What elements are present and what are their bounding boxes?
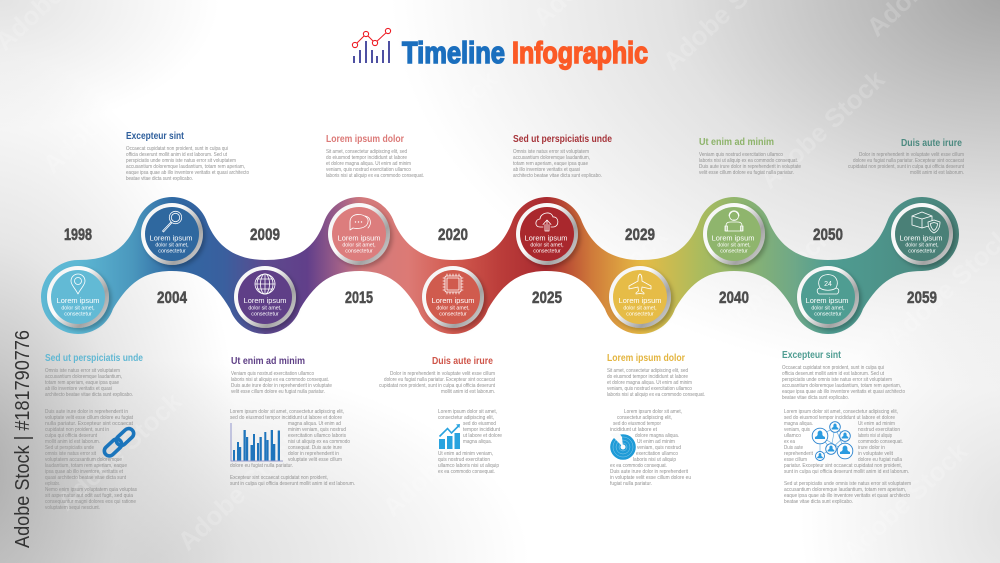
text block: Lorem ipsum dolor (top): veniam, quis nostrud exercitation ullamco <box>326 167 411 173</box>
timeline ribbon <box>41 197 959 334</box>
milestone 1998: location <box>47 266 109 328</box>
text block: Sed ut perspiciatis unde (bottom): laudantium, totam rem aperiam, eaque <box>45 463 127 469</box>
milestone 2050: 24h phone <box>797 266 859 328</box>
text block: Sed ut perspiciatis unde (top): architecto beatae vitae dicta sunt explicabo. <box>513 173 602 179</box>
watermark: Adobe Stock repeats: Adobe Stock <box>37 49 174 179</box>
logo icon: bars and line chart <box>352 28 391 63</box>
text block: Sed ut perspiciatis unde (bottom): voluptatem accusantium doloremque <box>45 457 122 463</box>
text block: Lorem ipsum dolor (bottom): Sit amet, consectetur adipiscing elit, sed <box>607 368 688 374</box>
text block: Ut enim ad minim (top): laboris nisi ut aliquip ex ea commodo consequat. <box>699 158 798 164</box>
year labels: 2004 <box>157 289 188 307</box>
text block: Duis aute irure (bottom): quis nostrud exercitation <box>438 457 490 463</box>
text block: Lorem ipsum dolor (top): Lorem ipsum dolor <box>326 134 404 145</box>
milestone 2040: support: consectetur <box>720 248 748 254</box>
icon: radial chart <box>610 433 636 460</box>
milestone 2050: 24h phone: Lorem ipsum <box>806 296 848 305</box>
milestone 2025: cloud upload: dolor sit amet, <box>530 242 564 248</box>
text block: Ut enim ad minim (bottom): exercitation ullamco laboris <box>288 433 346 439</box>
text block: Sed ut perspiciatis unde (top): Omnis iste natus error sit voluptatem <box>513 149 589 155</box>
text block: Duis aute irure (top): Dolor in reprehenderit in voluptate velit esse cillum <box>859 152 964 158</box>
text block: Excepteur sint (top): accusantium doloremque laudantium, totam rem aperiam, <box>126 164 245 170</box>
milestone 2050: 24h phone: consectetur <box>814 312 842 318</box>
watermark: Adobe Stock repeats: Adobe Stock <box>172 426 309 556</box>
text block: Sed ut perspiciatis unde (top): Sed ut perspiciatis unde <box>513 134 612 145</box>
text block: Lorem ipsum dolor (bottom): Duis aute irure dolor in reprehenderit <box>610 469 689 475</box>
text block: Lorem ipsum dolor (bottom): do eiusmod tempor incididunt ut labore <box>607 374 688 380</box>
title: Timeline <box>402 35 505 70</box>
text block: Excepteur sint (bottom): Occaecat cupidatat non proident, sunt in culpa qui <box>782 365 884 371</box>
text block: Lorem ipsum dolor (bottom): exercitation ullamco <box>636 451 678 457</box>
text block: Sed ut perspiciatis unde (bottom): Sed ut perspiciatis unde <box>45 445 94 451</box>
milestone 2059: box and shield <box>891 203 953 265</box>
text block: Sed ut perspiciatis unde (bottom): quasi architecto beatae vitae dicta sunt <box>45 475 127 481</box>
text block: Ut enim ad minim (top): Ut enim ad minim <box>699 137 774 148</box>
text block: Ut enim ad minim (bottom): Lorem ipsum dolor sit amet, consectetur adipiscing elit, <box>230 409 344 415</box>
milestone 2020: chip <box>422 266 484 328</box>
text block: Lorem ipsum dolor (bottom): veniam, quis nostrud <box>637 445 681 451</box>
text block: Lorem ipsum dolor (bottom): ex ea commodo consequat. <box>610 463 667 469</box>
text block: Duis aute irure (top): cupidatat non proident, sunt in culpa qui officia deserunt <box>848 164 964 170</box>
text block: Excepteur sint (top) <box>126 131 249 182</box>
text block: Ut enim ad minim (bottom): voluptate velit esse cillum <box>288 457 342 463</box>
watermark: Adobe Stock repeats: Adobe Stock <box>504 436 641 563</box>
text block: Excepteur sint (bottom): nostrud exercitation <box>858 427 900 433</box>
icon: airplane <box>629 274 651 294</box>
text block: Lorem ipsum dolor (bottom): Lorem ipsum dolor <box>607 353 685 364</box>
icon: magnifier <box>162 211 182 232</box>
text block: Sed ut perspiciatis unde (bottom): culpa qui officia deserunt <box>45 433 98 439</box>
text block: Excepteur sint (bottom): Duis aute <box>784 445 803 451</box>
year labels: 2050 <box>813 226 843 244</box>
text block: Excepteur sint (bottom): irure dolor in <box>858 445 885 451</box>
text block: Excepteur sint (bottom): beatae vitae dicta sunt explicabo. <box>782 395 849 401</box>
text block: Lorem ipsum dolor (bottom) <box>607 353 705 487</box>
year labels: 1998 <box>64 226 92 244</box>
text block: Excepteur sint (top): beatae vitae dicta sunt explicabo. <box>126 176 193 182</box>
text block: Excepteur sint (bottom): Sed ut perspiciatis unde omnis iste natus error sit voluptatem <box>784 481 911 487</box>
text block: Ut enim ad minim (bottom): dolor in reprehenderit in <box>288 451 339 457</box>
title: Infographic <box>512 35 648 70</box>
text block: Lorem ipsum dolor (bottom): in voluptate velit esse cillum dolore eu <box>610 475 691 481</box>
text block: Duis aute irure (bottom): Dolor in reprehenderit in voluptate velit esse cillum <box>390 371 495 377</box>
watermark: Adobe Stock repeats: Adobe Stock <box>707 406 844 536</box>
text block: Excepteur sint (bottom): ullamco <box>784 433 801 439</box>
text block: Excepteur sint (bottom): Excepteur sint <box>782 350 841 361</box>
text block: Lorem ipsum dolor (bottom): sed do eiusmod tempor <box>613 421 661 427</box>
milestone 2050: 24h phone: dolor sit amet, <box>811 306 845 312</box>
watermark: Adobe Stock repeats: Adobe Stock <box>537 221 674 351</box>
year labels <box>64 226 937 307</box>
milestone 2015: chat: dolor sit amet, <box>342 242 376 248</box>
text block: Ut enim ad minim (bottom): minim veniam, quis nostrud <box>288 427 346 433</box>
text block: Sed ut perspiciatis unde (bottom): totam rem aperiam, eaque ipsa quae <box>45 380 119 386</box>
text block: Excepteur sint (bottom): beatae vitae dicta sunt explicabo. <box>784 499 853 505</box>
text block: Sed ut perspiciatis unde (bottom): mollit anim id est laborum. <box>45 439 100 445</box>
text block: Excepteur sint (top): Occaecat cupidatat non proident, sunt in culpa qui <box>126 146 228 152</box>
year labels: 2025 <box>532 289 562 307</box>
text block: Duis aute irure (top): Duis aute irure <box>901 138 962 149</box>
milestone 2040: support: Lorem ipsum <box>712 234 754 242</box>
text block: Lorem ipsum dolor (bottom): veniam, quis nostrud exercitation ullamco <box>607 386 692 392</box>
milestone 2020: chip: dolor sit amet, <box>436 306 470 312</box>
year labels: 2009 <box>250 226 280 244</box>
text block: Duis aute irure (bottom): Ut enim ad minim veniam, <box>438 451 493 457</box>
text block: Sed ut perspiciatis unde (bottom): explicabo. <box>45 481 60 487</box>
watermark: Adobe Stock repeats: Adobe Stock <box>754 64 891 194</box>
milestone 2029: plane: dolor sit amet, <box>623 306 657 312</box>
milestone 2040: support <box>703 203 765 265</box>
milestone 2059: box and shield: Lorem ipsum <box>900 234 942 242</box>
text block: Ut enim ad minim (bottom): laboris nisi ut aliquip ex ea commodo consequat. <box>231 377 329 383</box>
watermark: Adobe Stock repeats: Adobe Stock <box>701 221 838 351</box>
milestone 2025: cloud upload <box>516 203 578 265</box>
text block: Lorem ipsum dolor (bottom): dolore magna aliqua. <box>635 433 679 439</box>
text block: Duis aute irure (bottom): Duis aute irure <box>432 356 493 367</box>
text block: Duis aute irure (bottom): ut labore et dolore <box>463 433 502 439</box>
text block: Sed ut perspiciatis unde (bottom): nulla pariatur. Excepteur sint occaecat <box>45 421 134 427</box>
text block: Ut enim ad minim (bottom): velit esse cillum dolore eu fugiat nulla pariatur. <box>231 389 325 395</box>
milestone 2009: globe: Lorem ipsum <box>244 296 286 305</box>
icon: globe <box>255 274 275 294</box>
text block: Excepteur sint (bottom): veniam, quis <box>784 427 810 433</box>
text block: Sed ut perspiciatis unde (bottom): sit aspernatur aut odit aut fugit, sed quia <box>45 493 133 499</box>
milestone 2009: globe <box>234 266 296 328</box>
text block: Sed ut perspiciatis unde (bottom): ipsa quae ab illo inventore, veritatis et <box>45 469 123 475</box>
text block: Ut enim ad minim (bottom): sunt in culpa qui officia deserunt mollit anim id est laborum. <box>230 481 355 487</box>
text block: Sed ut perspiciatis unde (bottom): architecto beatae vitae dicta sunt explicabo. <box>45 392 133 398</box>
text block: Lorem ipsum dolor (top): Sit amet, consectetur adipiscing elit, sed <box>326 149 407 155</box>
text block: Sed ut perspiciatis unde (top): totam rem aperiam, eaque ipsa quae <box>513 161 588 167</box>
year labels: 2015 <box>345 289 373 307</box>
milestone 2025: cloud upload: Lorem ipsum <box>525 234 567 242</box>
text block: Sed ut perspiciatis unde (top): ab illo inventore veritatis et quasi <box>513 167 580 173</box>
milestone 2059: box and shield: consectetur <box>908 248 936 254</box>
watermark: Adobe Stock repeats: Adobe Stock <box>367 64 504 194</box>
milestone 2015: chat: consectetur <box>345 248 373 254</box>
text block: Excepteur sint (bottom): accusantium doloremque laudantium, totam rem aperiam, <box>784 487 906 493</box>
text block: Ut enim ad minim (bottom): consequat. Duis aute irure <box>288 445 342 451</box>
milestone 1998: location: Lorem ipsum <box>57 296 99 305</box>
milestone 2004: search <box>141 203 203 265</box>
text block: Sed ut perspiciatis unde (bottom): Omnis iste natus error sit voluptatem <box>45 368 120 374</box>
milestone 2009: globe: consectetur <box>251 312 279 318</box>
milestone 2029: plane: Lorem ipsum <box>619 296 661 305</box>
text block: Ut enim ad minim (bottom): dolore eu fugiat nulla pariatur. <box>230 463 293 469</box>
icon: 24 hour phone <box>817 274 839 294</box>
text block: Duis aute irure (bottom): dolore eu fugiat nulla pariatur. Excepteur sint occaecat <box>384 377 495 383</box>
text block: Excepteur sint (bottom): pariatur. Excepteur sint occaecat cupidatat non proident, <box>784 463 902 469</box>
milestone 2015: chat: Lorem ipsum <box>338 234 380 242</box>
text block: Excepteur sint (bottom): perspiciatis unde omnis iste natus error sit voluptatem <box>782 377 892 383</box>
text block: Sed ut perspiciatis unde (bottom): Sed ut perspiciatis unde <box>45 353 143 364</box>
text block: Lorem ipsum dolor (top): laboris nisi ut aliquip ex ea commodo consequat. <box>326 173 424 179</box>
text block: Excepteur sint (bottom): in voluptate velit <box>858 451 894 457</box>
year labels: 2040 <box>719 289 749 307</box>
text block: Lorem ipsum dolor (bottom): fugiat nulla pariatur. <box>610 481 652 487</box>
milestone 2029: plane: consectetur <box>626 312 654 318</box>
milestone 2004: search: Lorem ipsum <box>150 234 192 242</box>
text block: Duis aute irure (bottom): Lorem ipsum dolor sit amet, <box>438 409 497 415</box>
text block: Sed ut perspiciatis unde (top): accusantium doloremque laudantium, <box>513 155 590 161</box>
text block: Lorem ipsum dolor (bottom): laboris nisi ut aliquip ex ea commodo consequat. <box>607 392 705 398</box>
milestone 2040: support: dolor sit amet, <box>717 242 751 248</box>
text block: Ut enim ad minim (bottom): Ut enim ad minim <box>231 356 305 367</box>
text block: Excepteur sint (top): eaque ipsa quae ab illo inventore veritatis et quasi architecto <box>126 170 249 176</box>
milestone 2020: chip: Lorem ipsum <box>432 296 474 305</box>
text block: Lorem ipsum dolor (bottom): Ut enim ad minim <box>637 439 675 445</box>
side credit: Adobe Stock number: Adobe Stock | #181790776 <box>12 330 34 548</box>
text block: Lorem ipsum dolor (top): do eiusmod tempor incididunt ut labore <box>326 155 407 161</box>
text block: Excepteur sint (bottom): Lorem ipsum dolor sit amet, consectetur adipiscing elit, <box>784 409 898 415</box>
text block: Ut enim ad minim (bottom): sed do eiusmod tempor incididunt ut labore et dolore <box>230 415 342 421</box>
milestone 2004: search: consectetur <box>158 248 186 254</box>
text block: Sed ut perspiciatis unde (bottom): ab illo inventore veritatis et quasi <box>45 386 112 392</box>
text block: Excepteur sint (bottom): reprehenderit <box>784 451 814 457</box>
milestone 2009: globe: dolor sit amet, <box>248 306 282 312</box>
title <box>402 35 648 70</box>
text block: Lorem ipsum dolor (bottom): laboris nisi ut aliquip <box>633 457 676 463</box>
text block: Sed ut perspiciatis unde (bottom): accusantium doloremque laudantium, <box>45 374 122 380</box>
text block: Sed ut perspiciatis unde (bottom): consequuntur magni dolores eos qui ratione <box>45 499 136 505</box>
text block: Excepteur sint (bottom): sunt in culpa qui officia deserunt mollit anim id est laborum. <box>784 469 909 475</box>
milestone 2059: box and shield: dolor sit amet, <box>905 242 939 248</box>
text block: Excepteur sint (bottom): dolore eu fugiat nulla <box>858 457 902 463</box>
text block: Duis aute irure (bottom): consectetur adipiscing elit, <box>438 415 494 421</box>
year labels: 2020 <box>438 226 468 244</box>
text block: Duis aute irure (top): mollit anim id est laborum. <box>910 170 964 176</box>
text block: Ut enim ad minim (top) <box>699 137 801 176</box>
milestone 2050: 24h phone: 24 <box>824 281 832 288</box>
text block: Excepteur sint (top): Excepteur sint <box>126 131 184 142</box>
text block: Duis aute irure (bottom): sed do eiusmod <box>463 421 496 427</box>
text block: Sed ut perspiciatis unde (bottom): cupidatat non proident, sunt in <box>45 427 109 433</box>
text block: Sed ut perspiciatis unde (bottom): Nemo enim ipsum voluptatem quia voluptas <box>45 487 137 493</box>
text block: Lorem ipsum dolor (bottom): et dolore magna aliqua. Ut enim ad minim <box>607 380 692 386</box>
text block: Lorem ipsum dolor (bottom): incididunt ut labore et <box>610 427 658 433</box>
icon: box with shield <box>912 212 940 233</box>
text block: Ut enim ad minim (bottom): Duis aute irure dolor in reprehenderit in voluptate <box>231 383 332 389</box>
text block: Excepteur sint (bottom): accusantium doloremque laudantium, totam rem aperiam, <box>782 383 901 389</box>
watermark: Adobe Stock repeats: Adobe Stock <box>377 392 514 522</box>
text block: Sed ut perspiciatis unde (bottom) <box>45 353 143 511</box>
text block: Duis aute irure (bottom): ullamco laboris nisi ut aliquip <box>438 463 499 469</box>
icon: cloud upload <box>536 213 558 231</box>
icon: map pin <box>71 274 85 294</box>
text block: Ut enim ad minim (top): velit esse cillum dolore eu fugiat nulla pariatur. <box>699 170 794 176</box>
text block: Sed ut perspiciatis unde (bottom): Duis aute irure dolor in reprehenderit in <box>45 409 128 415</box>
text block: Excepteur sint (bottom): eaque ipsa quae ab illo inventore veritatis et quasi architecto <box>784 493 910 499</box>
text block: Duis aute irure (bottom): magna aliqua. <box>463 439 492 445</box>
text block: Ut enim ad minim (top): Duis aute irure dolor in reprehenderit in voluptate <box>699 164 801 170</box>
text block: Excepteur sint (top): perspiciatis unde omnis iste natus error sit voluptatem <box>126 158 236 164</box>
milestone 1998: location: consectetur <box>64 312 92 318</box>
text block: Ut enim ad minim (bottom) <box>230 356 355 487</box>
icon: chat bubbles <box>350 214 370 230</box>
text block: Excepteur sint (bottom): commodo consequat. <box>858 439 903 445</box>
text block: Lorem ipsum dolor (bottom): Lorem ipsum dolor sit amet, <box>624 409 682 415</box>
text block: Duis aute irure (bottom): ex ea commodo consequat. <box>438 469 495 475</box>
text block: Ut enim ad minim (bottom): nisi ut aliquip ex ea commodo <box>288 439 350 445</box>
milestone 2025: cloud upload: consectetur <box>533 248 561 254</box>
milestone 2015: chat <box>328 203 390 265</box>
text block: Ut enim ad minim (bottom): magna aliqua. Ut enim ad <box>288 421 341 427</box>
milestone 2029: plane <box>609 266 671 328</box>
text block: Excepteur sint (bottom): officia deserunt mollit anim id est laborum. Sed ut <box>782 371 884 377</box>
milestone 1998: location: dolor sit amet, <box>61 306 95 312</box>
icon: chain link <box>102 427 136 458</box>
watermark: Adobe Stock repeats: Adobe Stock <box>204 221 341 351</box>
icon: microchip <box>443 274 463 294</box>
text block: Excepteur sint (bottom): eaque ipsa quae ab illo inventore veritatis et quasi architecto <box>782 389 905 395</box>
icon: growth chart <box>439 424 460 449</box>
text block: Excepteur sint (top): officia deserunt mollit anim id est laborum. Sed ut <box>126 152 227 158</box>
text block: Duis aute irure (top) <box>848 138 964 176</box>
bar chart icon <box>231 423 283 461</box>
watermark: Adobe Stock repeats: Adobe Stock <box>367 221 504 351</box>
milestone 2020: chip: consectetur <box>439 312 467 318</box>
text block: Sed ut perspiciatis unde (top) <box>513 134 612 179</box>
text block: Excepteur sint (bottom): ex ea <box>784 439 795 445</box>
text block: Duis aute irure (bottom): cupidatat non proident, sunt in culpa qui officia deserunt <box>379 383 495 389</box>
text block: Sed ut perspiciatis unde (bottom): voluptate velit esse cillum dolore eu fugiat <box>45 415 134 421</box>
text block: Excepteur sint (bottom): magna aliqua. <box>784 421 813 427</box>
text block: Duis aute irure (top): dolore eu fugiat nulla pariatur. Excepteur sint occaecat <box>853 158 964 164</box>
text block: Ut enim ad minim (bottom): Veniam quis nostrud exercitation ullamco <box>231 371 314 377</box>
text block: Sed ut perspiciatis unde (bottom): omnis iste natus error sit <box>45 451 96 457</box>
text block: Ut enim ad minim (bottom): Excepteur sint occaecat cupidatat non proident, <box>230 475 328 481</box>
watermark: Adobe Stock repeats: Adobe Stock <box>837 436 974 563</box>
year labels: 2029 <box>625 226 655 244</box>
text block: Excepteur sint (bottom): laboris nisi ut aliquip <box>858 433 892 439</box>
text block: Excepteur sint (bottom): Ut enim ad minim <box>858 421 895 427</box>
icon: headset agent <box>725 211 743 231</box>
text block: Sed ut perspiciatis unde (bottom): voluptatem sequi nesciunt. <box>45 505 100 511</box>
text block: Excepteur sint (bottom): sed do eiusmod tempor incididunt ut labore et dolore <box>784 415 895 421</box>
year labels: 2059 <box>907 289 937 307</box>
text block: Lorem ipsum dolor (top) <box>326 134 424 179</box>
icon: people network <box>812 422 853 460</box>
text block: Ut enim ad minim (top): Veniam quis nostrud exercitation ullamco <box>699 152 783 158</box>
watermark: Adobe Stock repeats: Adobe Stock <box>51 386 188 516</box>
text block: Duis aute irure (bottom) <box>379 356 502 475</box>
milestone 2004: search: dolor sit amet, <box>155 242 189 248</box>
text block: Duis aute irure (bottom): tempor incididunt <box>463 427 501 433</box>
text block: Excepteur sint (bottom): esse cillum <box>784 457 807 463</box>
text block: Lorem ipsum dolor (top): et dolore magna aliqua. Ut enim ad minim <box>326 161 411 167</box>
text block: Duis aute irure (bottom): mollit anim id est laborum. <box>441 389 495 395</box>
text block: Excepteur sint (bottom) <box>782 350 911 505</box>
text block: Lorem ipsum dolor (bottom): consectetur adipiscing elit, <box>617 415 672 421</box>
